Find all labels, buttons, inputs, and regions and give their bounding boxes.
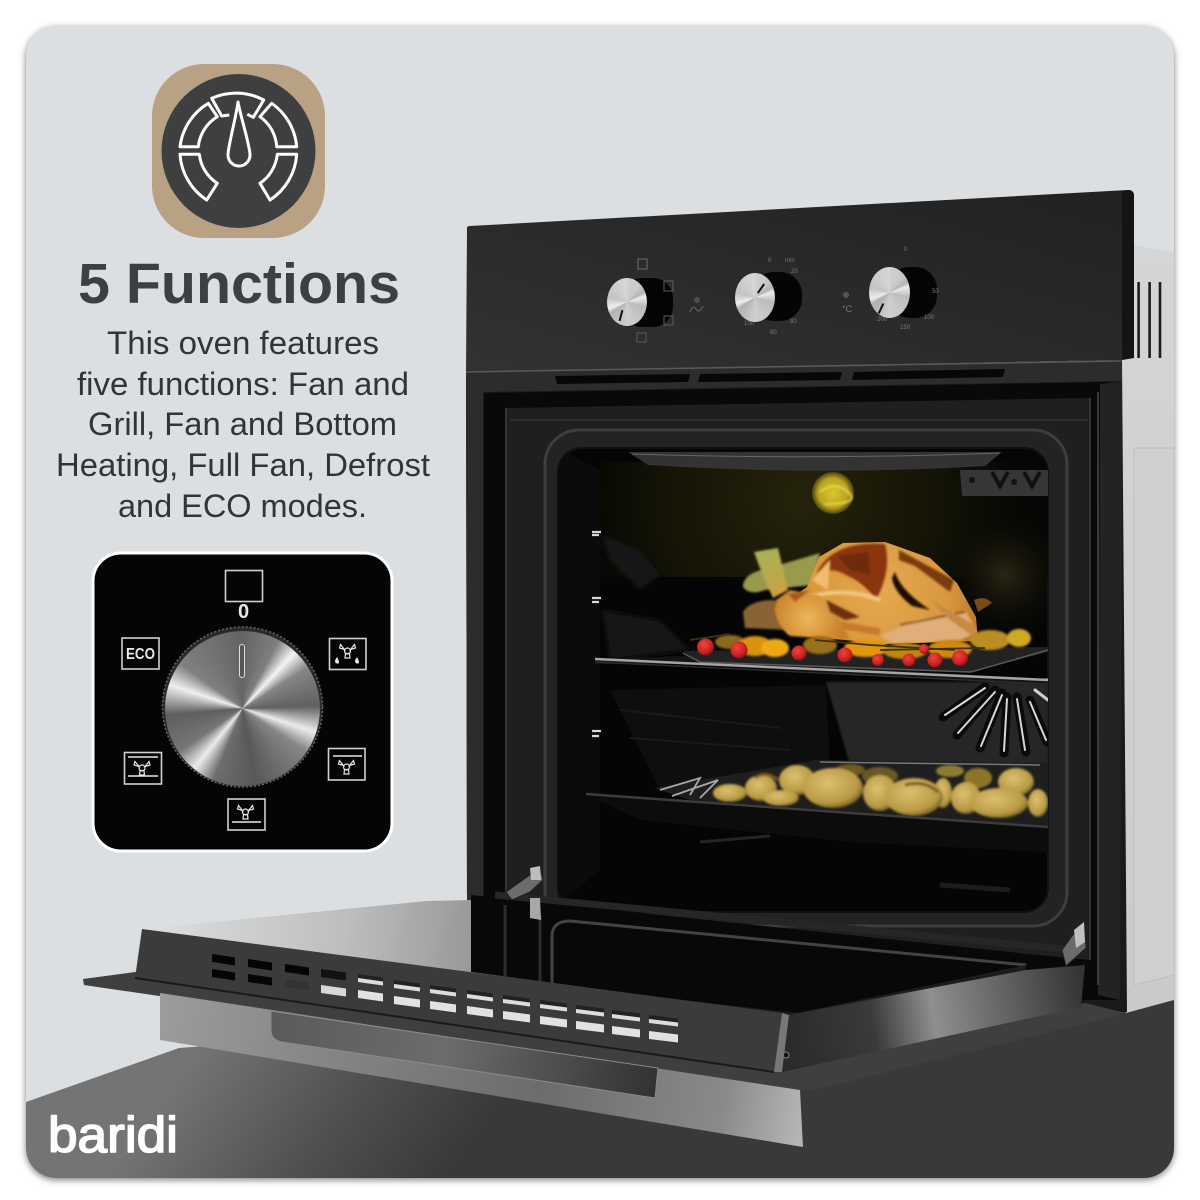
silver top of door — [181, 900, 471, 972]
lower back wall — [826, 682, 1048, 765]
foil lining — [654, 760, 1048, 826]
panel markings: 200 — [877, 317, 888, 323]
grill cover — [628, 452, 1002, 471]
panel markings: 0 — [768, 258, 772, 264]
drumstick — [754, 548, 860, 640]
knob bodies — [633, 278, 673, 327]
door front glass plate — [83, 972, 1122, 1036]
panel markings: min — [785, 258, 795, 264]
chicken rear leg — [743, 553, 820, 592]
oven cavity — [545, 430, 1067, 926]
door hinges — [506, 866, 1086, 966]
description text: five functions: Fan and — [77, 366, 409, 402]
panel markings: 60 — [770, 330, 777, 336]
panel markings: 100 — [744, 321, 755, 327]
oven lamp — [812, 472, 854, 514]
chicken body — [774, 542, 978, 644]
rack bar — [595, 659, 1048, 680]
panel markings: 20 — [791, 269, 798, 275]
panel markings: 80 — [790, 319, 797, 325]
description text: This oven features — [107, 325, 379, 361]
description text: and ECO modes. — [118, 488, 367, 524]
oven side panel — [1122, 245, 1174, 1013]
fan and grill — [328, 748, 365, 780]
logo: baridi — [48, 1107, 178, 1163]
vent slots — [555, 369, 1005, 384]
back wall glow — [600, 462, 1050, 577]
indicator lights — [694, 297, 700, 303]
description text: Heating, Full Fan, Defrost — [56, 447, 430, 483]
roasted skin patches — [800, 544, 978, 644]
fan and grill + bottom — [124, 752, 162, 784]
ECO mode — [122, 638, 159, 669]
left wall shading — [558, 448, 600, 905]
panel markings: °C — [842, 304, 853, 314]
door side face — [782, 965, 1085, 1072]
chicken neck — [743, 600, 790, 630]
oven knob 3 — [868, 267, 910, 318]
dark floor — [26, 1000, 1174, 1178]
oven knob 2 — [734, 272, 774, 322]
lower tray — [774, 806, 776, 807]
panel markings: 50 — [932, 289, 939, 295]
icon: gauge badge — [152, 64, 325, 238]
steel strip under door — [160, 993, 803, 1147]
large knob — [165, 630, 320, 786]
upper rack shadow — [596, 656, 1048, 685]
gauge segments — [180, 93, 297, 200]
tray upper — [683, 647, 1048, 672]
panel markings: 150 — [900, 325, 911, 331]
oven knob 1 — [607, 278, 647, 326]
floor and oven scene — [26, 190, 1174, 1178]
oven front body — [466, 360, 1127, 1012]
control panel — [466, 190, 1134, 372]
potatoes — [713, 764, 1048, 818]
off position — [226, 570, 262, 623]
vent holes — [212, 954, 678, 1042]
panel markings: 100 — [924, 315, 935, 321]
panel markings — [637, 247, 939, 342]
panel: function selector dial — [93, 553, 392, 851]
vented door edge — [135, 929, 789, 1072]
bracket — [960, 470, 1048, 496]
rack runners — [592, 532, 601, 736]
convection fan — [943, 680, 1048, 753]
description text — [56, 325, 430, 524]
tomatoes — [697, 638, 968, 668]
fan and bottom heating — [228, 799, 265, 830]
panel markings: 0 — [904, 247, 908, 253]
description text: Grill, Fan and Bottom — [88, 406, 397, 442]
ECO mode: ECO — [126, 646, 155, 663]
inner door — [471, 895, 1085, 1020]
defrost mode — [330, 638, 366, 670]
title: 5 Functions — [78, 252, 400, 316]
vegetables — [715, 629, 1031, 659]
door handle recess — [271, 1011, 658, 1098]
off position: 0 — [238, 601, 249, 623]
